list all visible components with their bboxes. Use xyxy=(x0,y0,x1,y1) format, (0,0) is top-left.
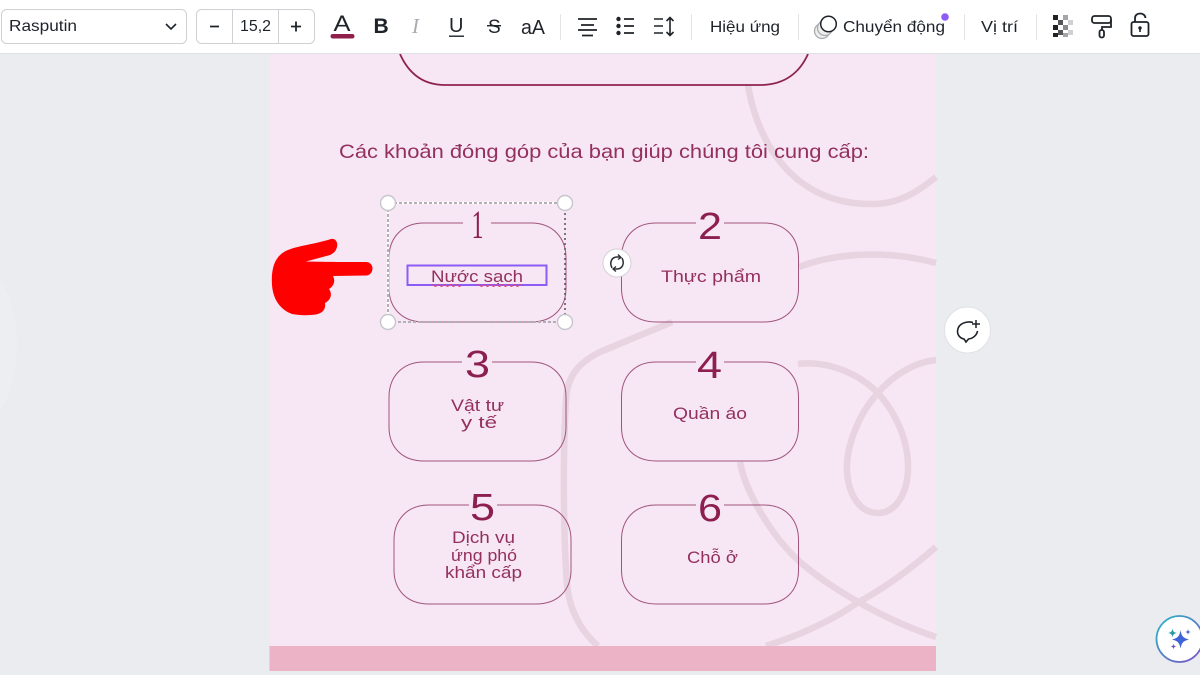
icon: unlocked padlock xyxy=(1132,14,1148,36)
notification dot xyxy=(941,13,949,21)
panel: design page xyxy=(270,54,936,671)
card 4: clothing xyxy=(622,345,798,461)
bottom band xyxy=(270,646,936,671)
card 4: clothing: Quần áo xyxy=(673,404,747,423)
card 1: clean water: Nước sạch xyxy=(431,267,523,286)
top card outline xyxy=(400,54,808,85)
font size stepper xyxy=(196,10,314,44)
font selector xyxy=(2,10,186,44)
button: add comment xyxy=(944,307,990,353)
icon: bullet list xyxy=(616,17,634,35)
card 3: medical supplies: Vật tư xyxy=(451,396,504,415)
case: aA xyxy=(521,17,546,39)
button: magic assistant xyxy=(1156,616,1200,662)
card 1: clean water xyxy=(389,202,566,322)
card 5: emergency response: 5 xyxy=(470,487,495,529)
icon: animate circles xyxy=(814,16,836,38)
animate label: Chuyển động xyxy=(843,18,945,36)
underline: U xyxy=(449,15,463,37)
toolbar xyxy=(0,0,1200,54)
card 3: medical supplies: 3 xyxy=(465,344,490,386)
effects label: Hiệu ứng xyxy=(710,19,780,36)
card 5: emergency response: Dịch vụ xyxy=(452,528,515,547)
text colour: A xyxy=(334,11,351,36)
card 5: emergency response: khẩn cấp xyxy=(445,563,522,582)
button: rotate xyxy=(603,249,631,277)
card 4: clothing: 4 xyxy=(697,345,722,387)
card 6: shelter xyxy=(622,488,798,604)
font selector: Rasputin xyxy=(9,18,77,35)
card 2: food: 2 xyxy=(698,206,722,248)
strikethrough: S xyxy=(488,17,501,38)
card 2: food: Thực phẩm xyxy=(661,267,761,286)
text colour xyxy=(330,11,354,38)
icon: paint roller xyxy=(1092,16,1111,38)
selection frame with handles xyxy=(380,196,572,330)
position label: Vị trí xyxy=(981,19,1019,36)
card 6: shelter: Chỗ ở xyxy=(687,548,738,567)
card 6: shelter: 6 xyxy=(698,488,722,530)
card 5: emergency response xyxy=(394,487,571,604)
icon: transparency xyxy=(1053,15,1073,37)
card 2: food xyxy=(622,206,798,322)
background curves xyxy=(564,85,936,646)
heading: Các khoản đóng góp của bạn giúp chúng tôi cung cấp: xyxy=(339,141,869,163)
text selection box xyxy=(408,266,546,286)
card 5: emergency response: ứng phó xyxy=(451,546,517,565)
icon: red pointing hand xyxy=(272,239,372,315)
bold: B xyxy=(374,15,389,38)
icon: align centre xyxy=(578,19,597,36)
divider xyxy=(560,14,1036,40)
card 3: medical supplies: y tế xyxy=(461,413,498,432)
font size stepper: 15,2 xyxy=(240,18,271,35)
card 3: medical supplies xyxy=(389,344,566,461)
italic: I xyxy=(411,14,420,38)
card 1: clean water: 1 xyxy=(472,202,484,247)
icon: line spacing xyxy=(654,18,674,36)
